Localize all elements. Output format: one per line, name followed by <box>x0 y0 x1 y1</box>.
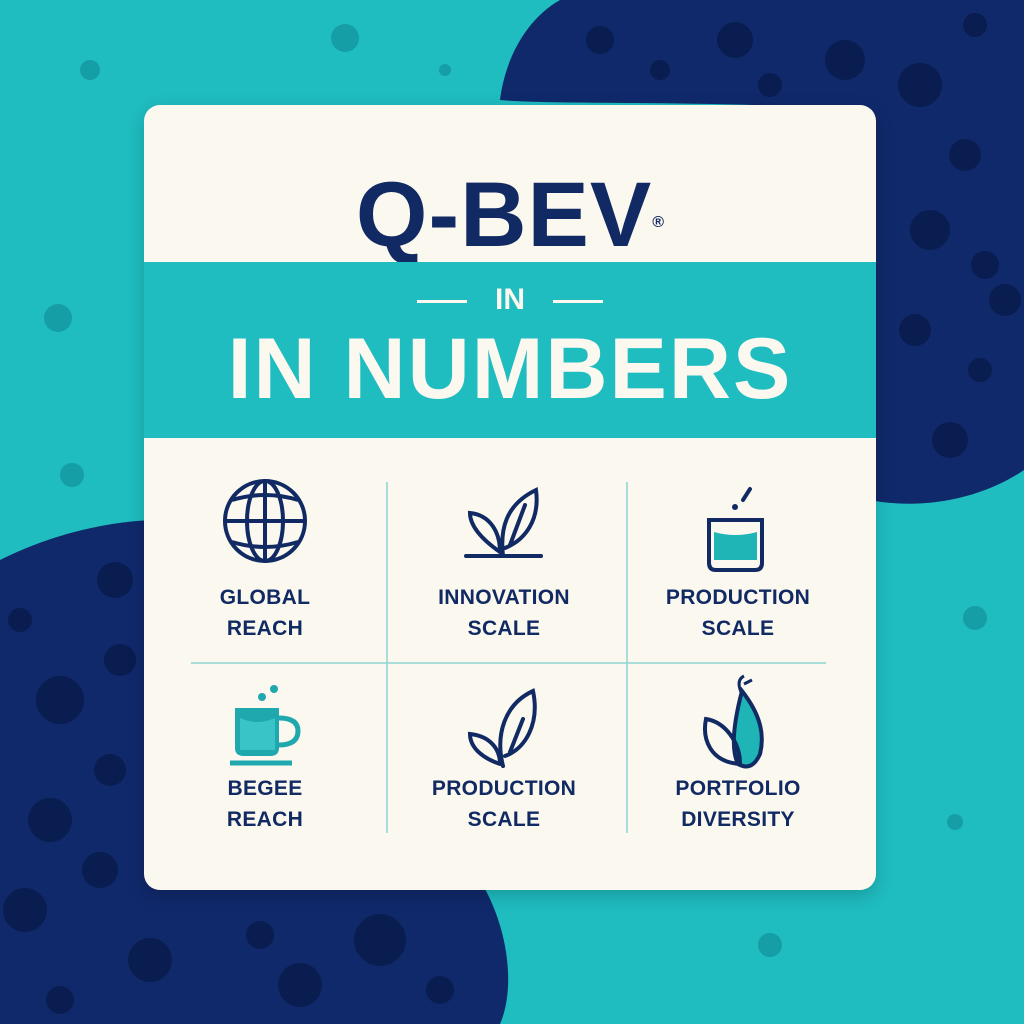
icon: leaf <box>470 691 535 766</box>
label: global reach: GLOBAL <box>220 586 310 609</box>
label: production scale <box>666 586 810 640</box>
label: production scale: PRODUCTION <box>666 586 810 609</box>
icon: cup <box>230 685 298 763</box>
icon: sprout <box>466 490 541 556</box>
subtitle small IN <box>417 283 603 316</box>
label: production scale 2: PRODUCTION <box>432 777 576 800</box>
label: production scale 2: SCALE <box>468 808 540 831</box>
teal band <box>144 262 876 438</box>
label: portfolio diversity: PORTFOLIO <box>675 777 801 800</box>
label: begee reach <box>227 777 303 831</box>
title: Q-BEV® <box>356 164 664 266</box>
icon: leaf and drop <box>705 676 762 766</box>
label: global reach: REACH <box>227 617 303 640</box>
icon: glass <box>709 489 762 570</box>
label: begee reach: BEGEE <box>227 777 303 800</box>
label: portfolio diversity: DIVERSITY <box>681 808 795 831</box>
label: global reach <box>220 586 310 640</box>
icon: globe <box>225 481 305 561</box>
label: portfolio diversity <box>675 777 801 831</box>
label: innovation scale: INNOVATION <box>438 586 570 609</box>
label: production scale: SCALE <box>702 617 774 640</box>
heading IN NUMBERS: IN NUMBERS <box>228 321 792 417</box>
label: production scale 2 <box>432 777 576 831</box>
label: innovation scale: SCALE <box>468 617 540 640</box>
blob: bottom left <box>0 520 508 1024</box>
label: begee reach: REACH <box>227 808 303 831</box>
main card <box>144 105 876 890</box>
label: innovation scale <box>438 586 570 640</box>
blob: top right <box>500 0 1024 504</box>
subtitle small IN: IN <box>495 283 525 316</box>
